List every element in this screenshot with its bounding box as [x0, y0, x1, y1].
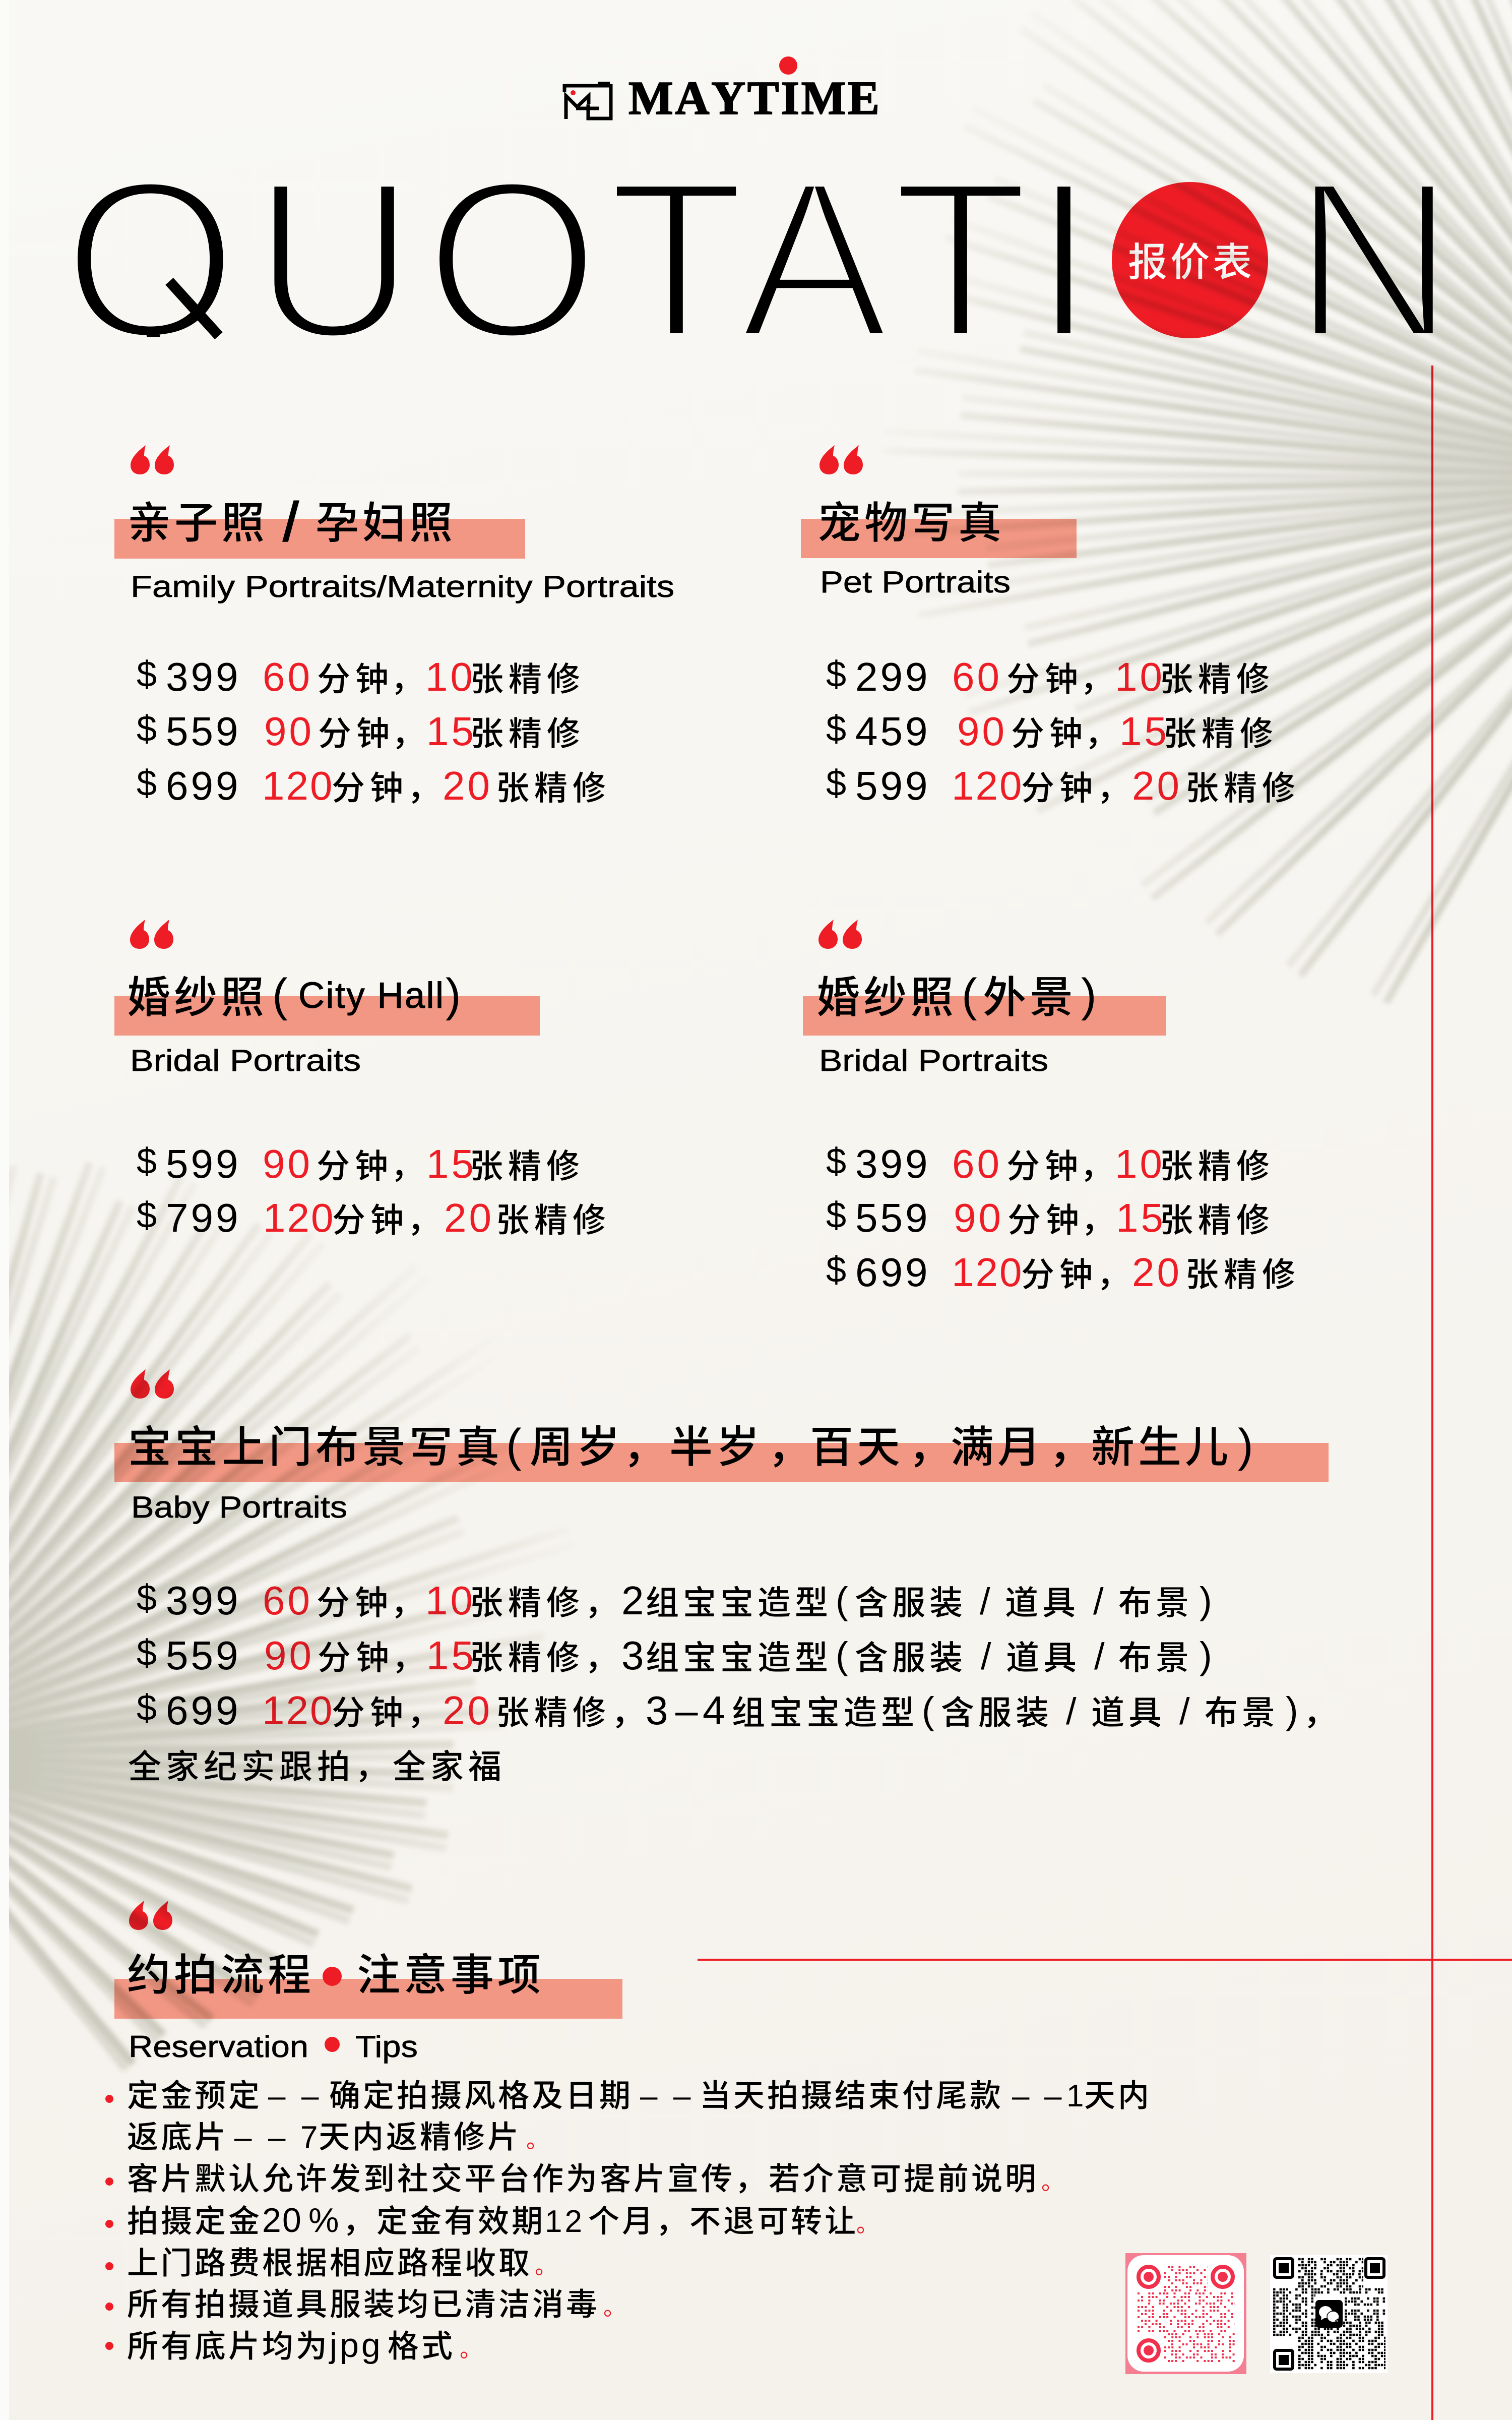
- price list: 20: [1132, 1250, 1182, 1295]
- qr modules: [1138, 2267, 1235, 2361]
- price list: 全家纪实跟拍，全家福: [128, 1748, 506, 1785]
- left margin strip: [0, 0, 9, 2420]
- price list: 张精修: [470, 660, 585, 698]
- price list: 布景: [1118, 1639, 1193, 1676]
- price list: 120: [262, 1688, 334, 1733]
- notes list: 。: [1041, 2170, 1063, 2195]
- price list: ，: [1081, 1201, 1119, 1239]
- notes list: ，: [343, 2204, 376, 2239]
- price list: 含服装: [855, 1584, 967, 1621]
- qr finder eyes: [1139, 2267, 1233, 2361]
- price list: 10: [425, 654, 475, 699]
- price list: ，: [391, 660, 429, 698]
- price list: 399: [166, 1578, 240, 1623]
- heading: /: [283, 491, 298, 552]
- price list: [137, 654, 611, 808]
- vertical red rule: [1431, 366, 1433, 2420]
- heading: ，: [1049, 1423, 1096, 1472]
- icon: quote marks: [129, 1901, 172, 1930]
- price list: 张精修: [1160, 660, 1275, 698]
- price list: ，: [392, 1639, 430, 1676]
- notes list: 定金有效期: [376, 2204, 545, 2239]
- price list: 分钟: [1021, 1256, 1098, 1293]
- price list: 分钟: [318, 1639, 394, 1676]
- notes list: 1: [1066, 2079, 1086, 2113]
- notes list: 当天拍摄结束付尾款: [700, 2079, 1003, 2113]
- price list: 分钟: [1021, 769, 1098, 807]
- price list: 分钟: [317, 660, 394, 698]
- price list: 道具: [1006, 1639, 1081, 1676]
- heading bar: [803, 996, 1166, 1036]
- price list: $: [826, 1195, 846, 1236]
- notes list: 。: [460, 2337, 482, 2362]
- notes list: 所有底片均为: [127, 2329, 330, 2364]
- price list: 张精修: [496, 769, 611, 807]
- price list: 张精修: [496, 1694, 611, 1731]
- brand logo: [564, 56, 879, 125]
- panel: reservation and tips: [105, 1901, 1152, 2365]
- price list: 60: [263, 654, 312, 699]
- price list: 张精修: [1185, 769, 1300, 807]
- english subtitle: Baby Portraits: [131, 1490, 347, 1524]
- price list: $: [137, 763, 157, 804]
- icon: quote marks: [130, 920, 173, 949]
- price list: 组宝宝造型: [732, 1694, 918, 1731]
- heading: (: [506, 1420, 522, 1471]
- price list: 20: [444, 1195, 494, 1240]
- price list: ，: [1080, 660, 1118, 698]
- price list: 599: [166, 1141, 240, 1186]
- price list: 90: [263, 1141, 312, 1186]
- price list: 60: [952, 1141, 1002, 1186]
- english subtitle: Bridal Portraits: [819, 1044, 1048, 1077]
- logo dot: [779, 56, 797, 75]
- heading: 亲子照: [128, 499, 268, 548]
- price list: ): [1200, 1580, 1212, 1621]
- heading bar: [114, 1979, 622, 2019]
- price list: 90: [957, 709, 1007, 754]
- price list: /: [1066, 1690, 1077, 1732]
- icon: quote marks: [131, 445, 174, 474]
- price list: 699: [166, 763, 240, 808]
- price list: ，: [392, 715, 430, 752]
- heading: City Hall: [298, 976, 444, 1016]
- price list: [826, 1141, 1300, 1295]
- price list: 599: [855, 763, 930, 808]
- price list: $: [137, 1578, 157, 1618]
- price list: 分钟: [1007, 1201, 1084, 1239]
- notes list: 20%: [262, 2201, 341, 2240]
- price list: 分钟: [317, 1147, 393, 1185]
- heading bar: [114, 519, 525, 559]
- heading: [127, 1951, 544, 2000]
- price list: 15: [426, 1633, 476, 1678]
- price list: 559: [166, 1633, 240, 1678]
- heading: 注意事项: [357, 1951, 544, 2000]
- price list: /: [1094, 1636, 1105, 1677]
- heading: 百天: [810, 1423, 904, 1472]
- english subtitle: [129, 2030, 418, 2064]
- price list: $: [137, 1141, 157, 1182]
- english subtitle: Reservation: [129, 2030, 308, 2064]
- english subtitle: Tips: [355, 2030, 418, 2064]
- price list: 2: [621, 1578, 646, 1623]
- notes list: 个月，不退可转让: [588, 2204, 858, 2239]
- price list: 10: [425, 1578, 475, 1623]
- notes list: 格式: [388, 2329, 455, 2364]
- price list: ，: [407, 1694, 446, 1731]
- price list: 120: [262, 763, 334, 808]
- heading: 婚纱照: [127, 974, 268, 1022]
- heading: 满月: [951, 1423, 1044, 1472]
- red circle badge: [1112, 182, 1268, 338]
- price list: 90: [264, 1633, 314, 1678]
- price list: ，: [585, 1584, 623, 1621]
- price list: 120: [952, 763, 1023, 808]
- price list: ，: [391, 1147, 429, 1185]
- price list: $: [826, 1141, 846, 1182]
- price list: 15: [426, 709, 476, 754]
- price list: 张精修: [470, 1639, 585, 1676]
- heading: 周岁: [530, 1423, 623, 1472]
- red circle badge: 报价表: [1128, 240, 1255, 284]
- notes list: 确定拍摄风格及日期: [329, 2079, 633, 2113]
- price list: 10: [1115, 1141, 1165, 1186]
- english subtitle: Bridal Portraits: [130, 1044, 361, 1077]
- heading: ): [1238, 1420, 1253, 1471]
- english subtitle: Pet Portraits: [820, 565, 1011, 599]
- price list: 布景: [1118, 1584, 1193, 1621]
- price list: 张精修: [470, 715, 585, 752]
- price list: 张精修: [1160, 1147, 1275, 1185]
- price list: 含服装: [941, 1694, 1053, 1731]
- notes list: 定金预定: [127, 2079, 262, 2113]
- price list: 699: [855, 1250, 930, 1295]
- main title: [78, 182, 1433, 339]
- notes list: ––: [640, 2079, 693, 2113]
- price list: 张精修: [470, 1147, 585, 1185]
- price list: (: [922, 1689, 934, 1731]
- icon: camera monogram: [564, 84, 611, 119]
- qr finder centers: [1279, 2263, 1380, 2365]
- price list: 60: [952, 654, 1002, 699]
- qr finder squares: [1275, 2259, 1384, 2369]
- notes list: 。: [535, 2254, 557, 2279]
- heading bar: [801, 519, 1077, 558]
- notes list: 所有拍摄道具服装均已清洁消毒: [127, 2287, 600, 2322]
- qr modules: [1273, 2259, 1385, 2368]
- price list: ): [1200, 1635, 1212, 1676]
- heading bar: [114, 996, 540, 1036]
- price list: 20: [443, 1688, 492, 1733]
- price list: 299: [855, 654, 930, 699]
- heading bar: [114, 1443, 1329, 1482]
- notes list: 。: [856, 2212, 878, 2237]
- notes list: 。: [603, 2295, 625, 2320]
- price list: (: [836, 1580, 848, 1621]
- price list: 15: [426, 1141, 476, 1186]
- price list: 20: [443, 763, 492, 808]
- heading: 半岁: [669, 1423, 763, 1472]
- heading: 孕妇照: [316, 499, 456, 548]
- panel: family and maternity portraits: [114, 445, 674, 808]
- Q tail stroke: [169, 281, 219, 336]
- heading: 外景: [983, 974, 1077, 1022]
- price list: 120: [952, 1250, 1023, 1295]
- price list: 90: [264, 709, 314, 754]
- notes list: 7: [300, 2120, 320, 2155]
- price list: /: [1093, 1581, 1104, 1622]
- price list: 90: [954, 1195, 1003, 1240]
- logo wordmark: MAYTIME: [628, 72, 879, 125]
- price list: $: [826, 763, 846, 804]
- price list: 道具: [1005, 1584, 1080, 1621]
- heading: 宝宝上门布景写真: [128, 1423, 503, 1472]
- heading: 新生儿: [1091, 1423, 1232, 1472]
- price list: 分钟: [332, 769, 408, 807]
- heading: 婚纱照: [816, 974, 957, 1022]
- main title: QUOTATION: [63, 134, 1455, 385]
- price list: 559: [166, 709, 240, 754]
- price list: 张精修: [496, 1201, 611, 1239]
- price list: ，: [611, 1694, 650, 1731]
- notes list: ––: [234, 2120, 288, 2155]
- price list: $: [137, 1633, 157, 1673]
- notes list: ––: [1012, 2079, 1064, 2113]
- heading: ，: [768, 1423, 814, 1472]
- icon: quote marks: [820, 445, 863, 474]
- price list: 399: [855, 1141, 930, 1186]
- price list: 3–4: [646, 1688, 728, 1733]
- price list: [128, 1578, 1342, 1785]
- price list: 张精修: [1160, 1201, 1275, 1239]
- price list: ，: [407, 1201, 446, 1239]
- notes list: ––: [268, 2079, 321, 2113]
- panel: pet portraits: [801, 445, 1300, 808]
- price list: 15: [1119, 709, 1169, 754]
- price list: ，: [1080, 1147, 1118, 1185]
- price list: 分钟: [317, 1584, 393, 1621]
- price list: $: [826, 709, 846, 749]
- price list: ，: [391, 1584, 429, 1621]
- price list: 分钟: [332, 1694, 408, 1731]
- heading: ，: [623, 1423, 670, 1472]
- price list: [826, 654, 1300, 808]
- price list: /: [981, 1636, 991, 1677]
- heading: ): [446, 970, 461, 1021]
- price list: ，: [1085, 715, 1123, 752]
- qr finder pupils: [1144, 2272, 1228, 2355]
- price list: 399: [166, 654, 240, 699]
- notes list: 。: [526, 2128, 548, 2153]
- price list: 布景: [1205, 1694, 1279, 1731]
- price list: 组宝宝造型: [646, 1639, 832, 1676]
- panel: baby portraits: [114, 1369, 1342, 1785]
- notes list: 返底片: [127, 2120, 228, 2155]
- price list: (: [836, 1635, 848, 1676]
- price list: 组宝宝造型: [646, 1584, 832, 1621]
- icon: wechat: [1315, 2300, 1343, 2328]
- notes list: 天内: [1084, 2079, 1152, 2113]
- red qr code: [1125, 2253, 1246, 2374]
- icon: quote marks: [131, 1369, 174, 1399]
- notes list: 12: [545, 2204, 585, 2239]
- notes list: 拍摄定金: [127, 2204, 262, 2239]
- notes list: 客片默认允许发到社交平台作为客片宣传，若介意可提前说明: [127, 2162, 1039, 2197]
- price list: 10: [1115, 654, 1165, 699]
- notes list: [105, 2079, 1152, 2365]
- price list: 3: [621, 1633, 646, 1678]
- price list: 分钟: [1006, 660, 1083, 698]
- palm shadow: top right: [870, 0, 1512, 1003]
- panel: bridal city hall: [114, 920, 611, 1240]
- heading: 宠物写真: [817, 499, 1005, 548]
- icon: quote marks: [818, 920, 862, 949]
- price list: $: [826, 654, 846, 695]
- price list: $: [137, 1195, 157, 1236]
- heading: ): [1081, 970, 1097, 1021]
- price list: 15: [1116, 1195, 1166, 1240]
- price list: 699: [166, 1688, 240, 1733]
- heading: 约拍流程: [127, 1951, 314, 2000]
- price list: ): [1286, 1689, 1298, 1731]
- price list: 分钟: [1011, 715, 1088, 752]
- price list: $: [137, 1688, 157, 1728]
- price list: $: [826, 1250, 846, 1290]
- heading: ，: [908, 1423, 955, 1472]
- price list: 含服装: [855, 1639, 967, 1676]
- panel: bridal outdoor: [803, 920, 1300, 1295]
- heading: (: [272, 970, 288, 1021]
- price list: 分钟: [332, 1201, 409, 1239]
- price list: ，: [1097, 1256, 1135, 1293]
- price list: ，: [1097, 769, 1135, 807]
- price list: 559: [855, 1195, 930, 1240]
- wechat qr code: [1270, 2255, 1388, 2373]
- price list: ，: [1303, 1694, 1342, 1731]
- english subtitle: Family Portraits/Maternity Portraits: [131, 570, 674, 603]
- price list: 道具: [1091, 1694, 1166, 1731]
- price list: /: [1179, 1690, 1190, 1732]
- heading: (: [962, 970, 977, 1021]
- price list: 张精修: [1163, 715, 1278, 752]
- price list: 分钟: [1006, 1147, 1083, 1185]
- price list: ，: [407, 769, 446, 807]
- price list: 120: [263, 1195, 335, 1240]
- price list: 张精修: [470, 1584, 585, 1621]
- price list: 799: [166, 1195, 240, 1240]
- price list: $: [137, 709, 157, 749]
- notes list: 上门路费根据相应路程收取: [127, 2246, 532, 2281]
- notes list: 天内返精修片: [319, 2120, 521, 2155]
- palm shadow: lower left: [0, 1162, 582, 2079]
- price list: 分钟: [318, 715, 395, 752]
- horizontal red rule: [698, 1959, 1512, 1961]
- price list: 60: [263, 1578, 312, 1623]
- bullet dots: [105, 2095, 113, 2350]
- price list: 459: [855, 709, 930, 754]
- notes list: jpg: [329, 2326, 383, 2365]
- price list: /: [980, 1581, 990, 1622]
- price list: ，: [585, 1639, 623, 1676]
- price list: [137, 1141, 611, 1240]
- price list: 20: [1132, 763, 1182, 808]
- price list: $: [137, 654, 157, 695]
- price list: 张精修: [1185, 1256, 1300, 1293]
